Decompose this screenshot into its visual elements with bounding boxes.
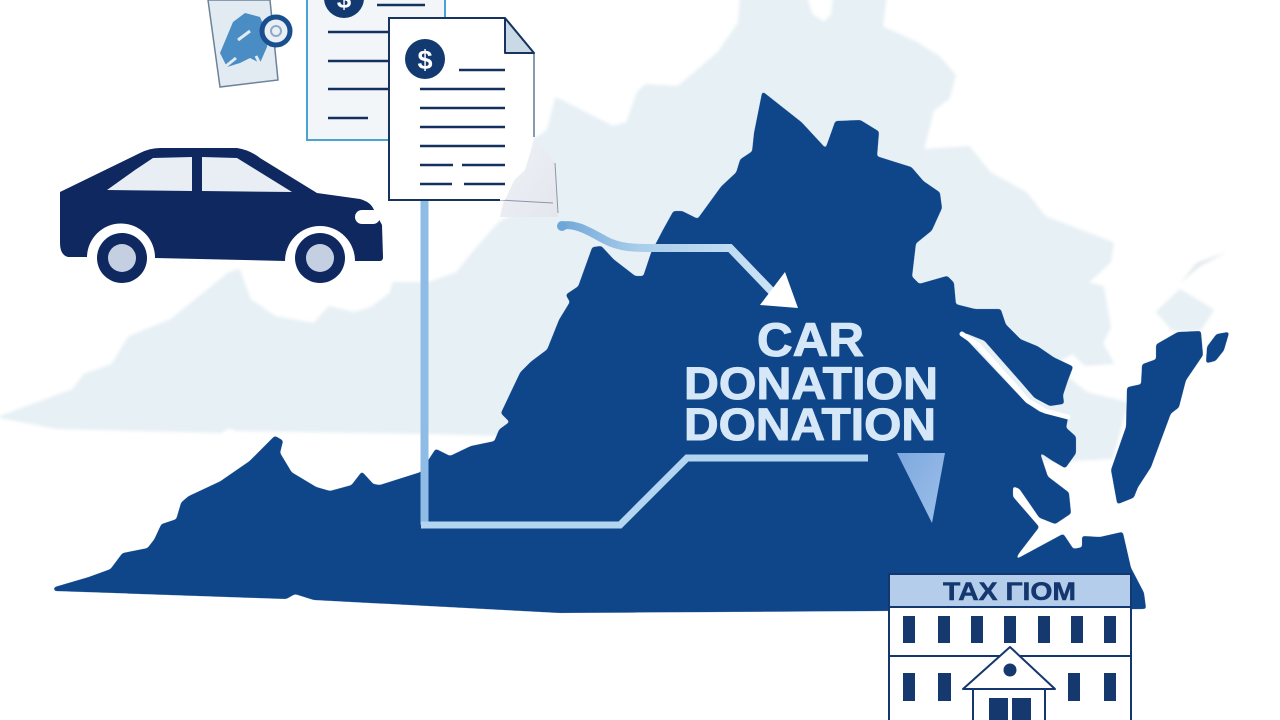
background light map	[0, 0, 1227, 460]
front wheel	[295, 233, 345, 283]
down triangle pointer	[897, 453, 945, 523]
main dark Virginia map	[55, 93, 1228, 612]
title: car donation: CAR	[757, 313, 864, 366]
eastern shore	[1112, 332, 1202, 503]
lower windows	[903, 673, 1116, 701]
flow arrow into label	[557, 221, 798, 308]
icon: car	[60, 148, 383, 283]
upper windows	[903, 616, 1116, 643]
rear window	[107, 157, 192, 191]
title: car donation: DONATION	[684, 358, 938, 409]
entrance portico	[963, 647, 1055, 720]
title: car donation	[684, 313, 938, 450]
arrowhead	[760, 272, 798, 308]
front document	[389, 18, 534, 200]
river inlet	[962, 334, 1068, 417]
barrier island	[1207, 333, 1228, 362]
front document: $	[417, 45, 433, 75]
faint page curl	[500, 137, 558, 217]
headlight	[355, 210, 380, 224]
back document	[307, 0, 445, 140]
icon: small map sheet	[208, 0, 290, 87]
front window	[202, 157, 292, 192]
header band	[889, 574, 1131, 607]
building sign: TAX ΓIOM	[943, 578, 1076, 606]
title: car donation: DONATION	[684, 399, 936, 450]
rear wheel	[97, 233, 147, 283]
connector line from documents to label	[421, 200, 868, 525]
tax office building	[889, 574, 1131, 720]
